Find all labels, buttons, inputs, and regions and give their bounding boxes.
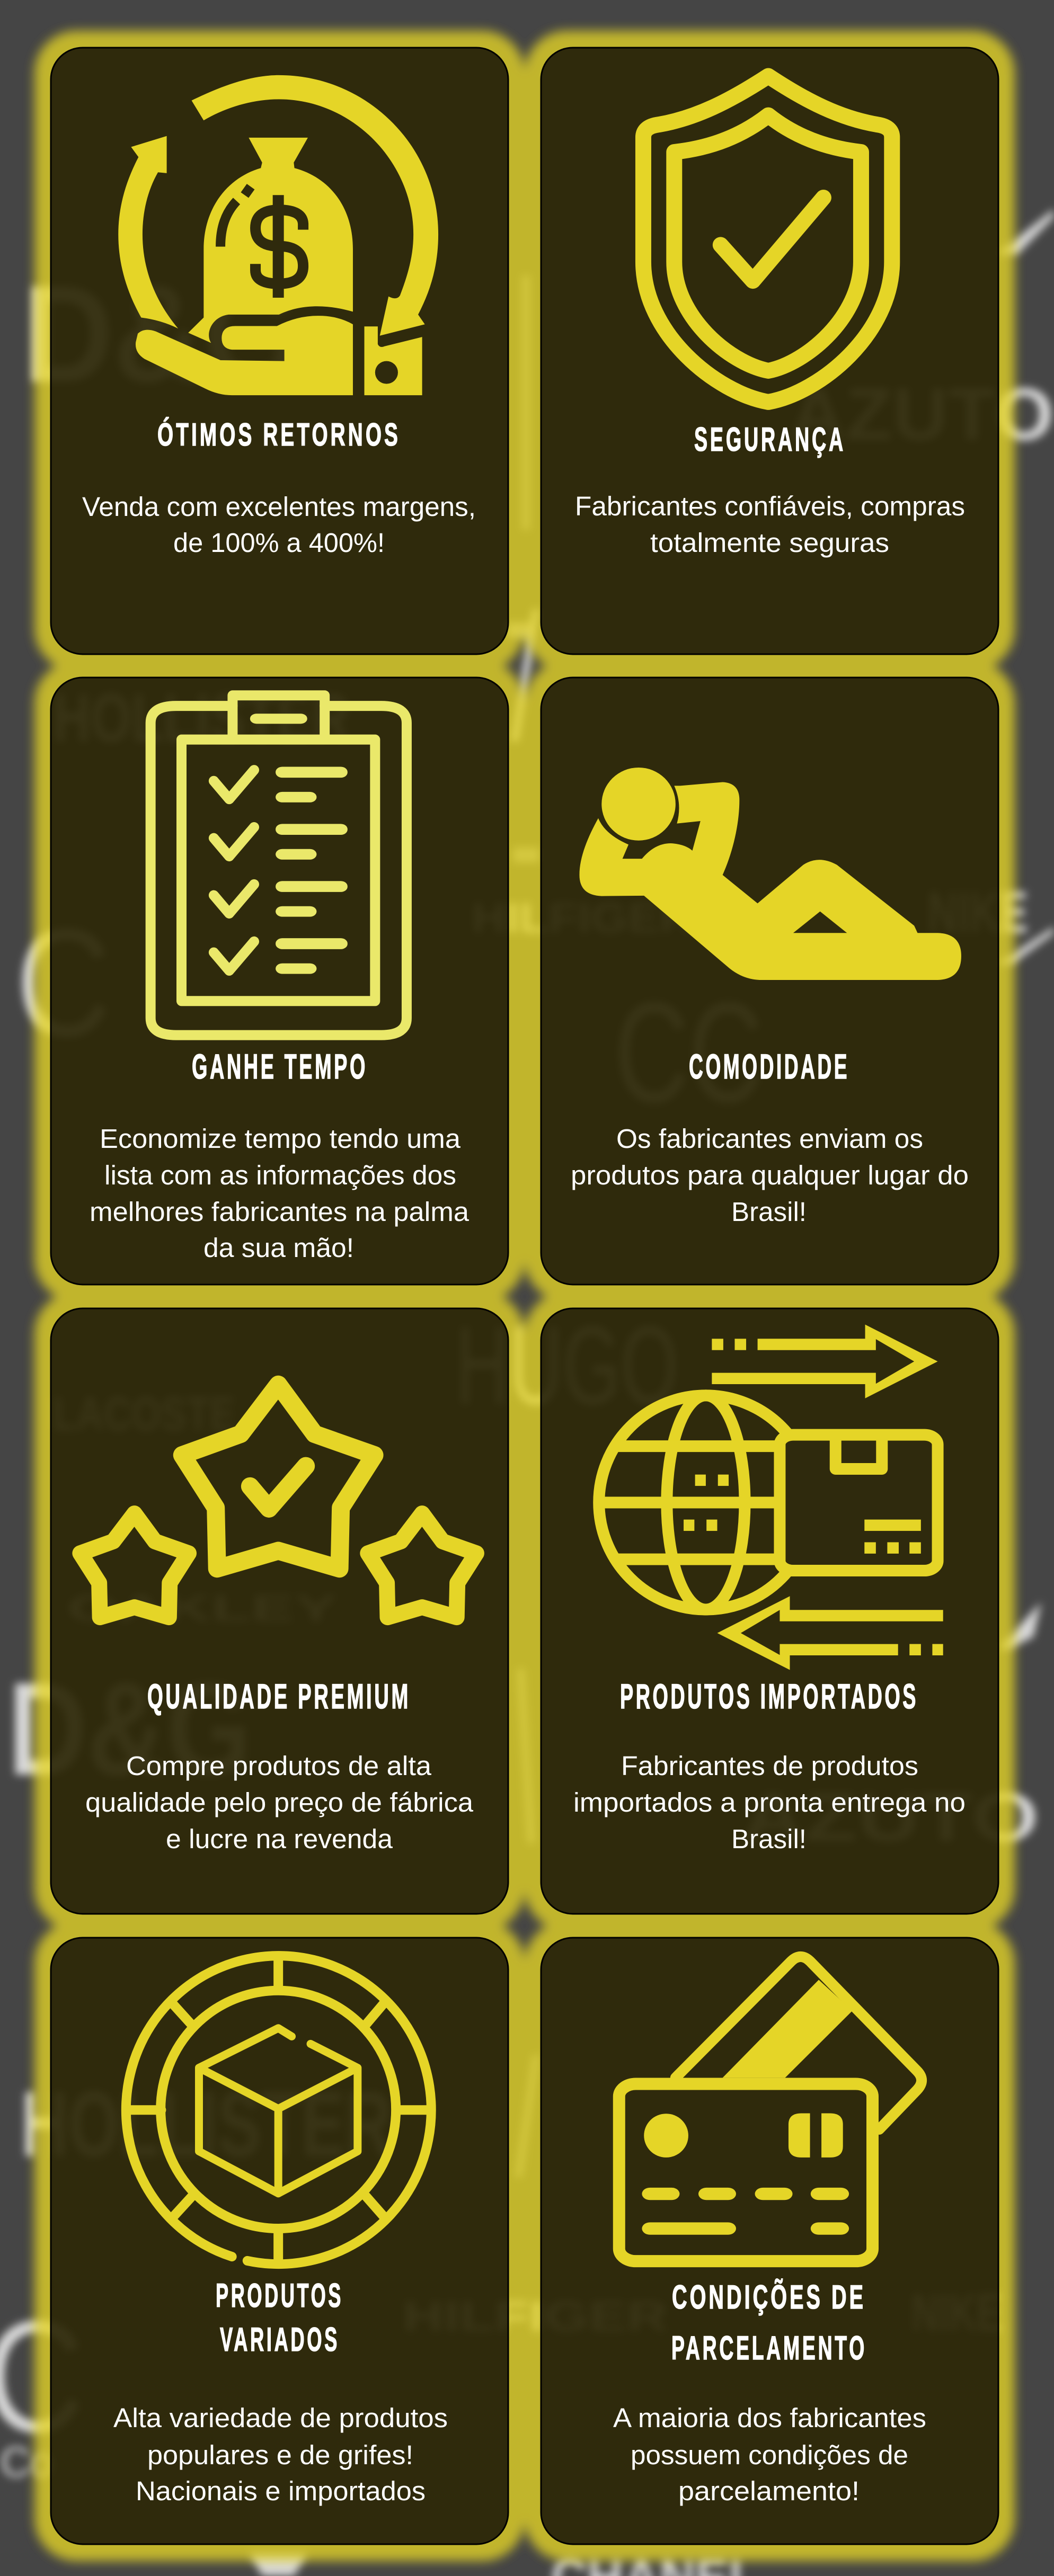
- panel: ganhe tempo: [51, 678, 508, 1285]
- heading: ÓTIMOS RETORNOS: [157, 417, 401, 452]
- text block: e lucre na revenda: [166, 1824, 393, 1854]
- background with blurred brand logos: AZUTO: [742, 1778, 1039, 1856]
- text block: [573, 1751, 966, 1854]
- text block: de 100% a 400%!: [173, 528, 385, 558]
- background with blurred brand logos: OAKLEY: [67, 1588, 338, 1629]
- background with blurred brand logos: D&G: [24, 257, 299, 411]
- text block: Alta variedade de produtos: [113, 2403, 448, 2433]
- heading: [671, 2278, 867, 2367]
- background with blurred brand logos: HUGO: [456, 1303, 678, 1428]
- text block: Fabricantes confiáveis, compras: [575, 491, 965, 521]
- text block: Brasil!: [731, 1824, 807, 1854]
- heading: PRODUTOS: [216, 2277, 343, 2314]
- text block: totalmente seguras: [650, 528, 889, 558]
- panel: comodidade: [541, 678, 998, 1285]
- heading: CONDIÇÕES DE: [672, 2278, 866, 2316]
- text block: Compre produtos de alta: [126, 1751, 432, 1781]
- icon: three stars with check: [80, 1385, 476, 1617]
- panel: qualidade premium: [51, 1308, 508, 1914]
- icon: credit cards: [619, 1957, 922, 2261]
- heading: COMODIDADE: [689, 1047, 849, 1086]
- heading: QUALIDADE PREMIUM: [147, 1677, 411, 1716]
- icon: money bag on hand: [118, 75, 438, 395]
- heading: SEGURANÇA: [694, 421, 846, 458]
- text block: qualidade pelo preço de fábrica: [85, 1787, 474, 1817]
- heading: VARIADOS: [220, 2321, 340, 2358]
- text block: produtos para qualquer lugar do: [571, 1160, 969, 1190]
- background with blurred brand logos: HOLLISTER: [53, 679, 350, 756]
- text block: Economize tempo tendo uma: [100, 1124, 461, 1154]
- text block: Brasil!: [731, 1197, 807, 1227]
- icon: globe, parcel and arrows: [599, 1325, 943, 1670]
- background with blurred brand logos: CC: [615, 973, 763, 1133]
- panel: segurança: [541, 48, 998, 654]
- text block: importados a pronta entrega no: [573, 1787, 966, 1817]
- text block: Fabricantes de produtos: [621, 1751, 918, 1781]
- text block: [85, 1751, 474, 1854]
- background with blurred brand logos: HILFIGER: [403, 2293, 668, 2340]
- text block: [82, 492, 476, 558]
- text block: [113, 2403, 448, 2506]
- heading: [216, 2277, 343, 2358]
- text block: [575, 491, 965, 558]
- text block: possuem condições de: [631, 2440, 908, 2470]
- text block: populares e de grifes!: [147, 2440, 413, 2470]
- icon: cube inside ring: [126, 1956, 431, 2264]
- icon: shield with check: [643, 76, 892, 402]
- text block: Venda com excelentes margens,: [82, 492, 476, 522]
- text block: [571, 1124, 969, 1227]
- text block: A maioria dos fabricantes: [613, 2403, 926, 2433]
- background with blurred brand logos: Co: [0, 2438, 54, 2485]
- background with blurred brand logos: LACOSTE: [53, 1388, 235, 1441]
- text block: parcelamento!: [678, 2476, 860, 2506]
- background with blurred brand logos: D&G: [8, 1655, 252, 1803]
- background with blurred brand logos: NIKE: [911, 2283, 1002, 2342]
- panel: condições de parcelamento: [541, 1938, 998, 2544]
- heading: GANHE TEMPO: [192, 1047, 368, 1086]
- background with blurred brand logos: HOLLISTER: [21, 2073, 392, 2176]
- icon: reclining person: [579, 768, 961, 980]
- background with blurred brand logos: HILFIGER: [472, 894, 694, 941]
- panel: produtos variados: [51, 1938, 508, 2544]
- panel: ótimos retornos: [51, 48, 508, 654]
- text block: da sua mão!: [203, 1233, 354, 1263]
- text block: Os fabricantes enviam os: [616, 1124, 923, 1154]
- background with blurred brand logos: C: [16, 897, 111, 1068]
- text block: melhores fabricantes na palma: [90, 1197, 470, 1227]
- text block: lista com as informações dos: [104, 1160, 456, 1190]
- text block: [90, 1124, 470, 1263]
- background with blurred brand logos: AZUTO: [790, 372, 1054, 456]
- panel: produtos importados: [541, 1308, 998, 1914]
- text block: Nacionais e importados: [136, 2476, 426, 2506]
- icon: clipboard checklist: [150, 696, 406, 1035]
- heading: PARCELAMENTO: [671, 2330, 867, 2367]
- text block: [613, 2403, 926, 2506]
